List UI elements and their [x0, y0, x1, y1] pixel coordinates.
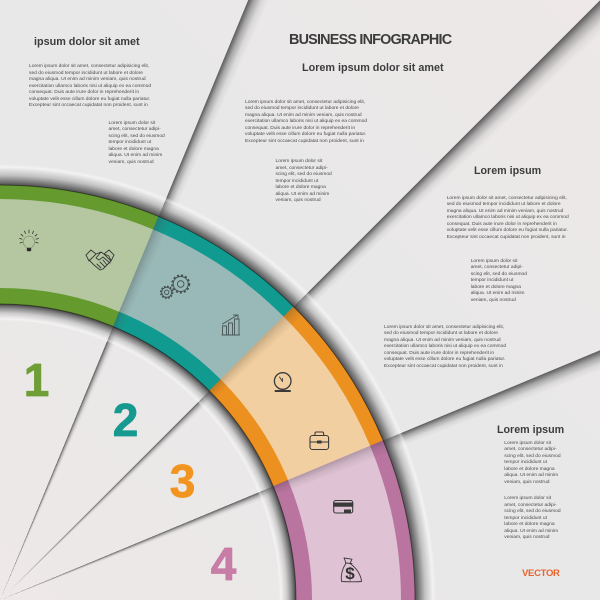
icon: clock [274, 373, 291, 391]
icon: money bag [341, 558, 362, 583]
text block: panel 4 lower: Lorem ipsum dolor sit amet, consectetur adipi- scing elit, sed do eiusmod tempor incididunt ut labore et dolore magna aliqua. Ut enim ad minim veniam, quis nostrud [504, 496, 561, 540]
heading: panel 4: Lorem ipsum [497, 424, 564, 436]
icon: briefcase [310, 432, 329, 450]
icon: light bulb [20, 230, 38, 251]
text block: panel 3 narrow: Lorem ipsum dolor sit amet, consectetur adipi- scing elit, sed do eiusmod tempor incididunt ut labore et dolore magna aliqua. Ut enim ad minim veniam, quis nostrud [471, 259, 527, 303]
icon: money bag: $ [345, 564, 355, 583]
main title: BUSINESS INFOGRAPHIC [289, 32, 451, 48]
numeral 2: 2 [113, 394, 138, 446]
icon: credit card [334, 500, 353, 513]
text block: panel 4 upper: Lorem ipsum dolor sit amet, consectetur adipi- scing elit, sed do eiusmod tempor incididunt ut labore et dolore magna aliqua. Ut enim ad minim veniam, quis nostrud [504, 441, 561, 485]
text block: panel 2 narrow: Lorem ipsum dolor sit amet, consectetur adipi- scing elit, sed do eiusmod tempor incididunt ut labore et dolore magna aliqua. Ut enim ad minim veniam, quis nostrud [276, 159, 332, 203]
numeral 4: 4 [211, 538, 237, 590]
text block: panel 2 wide: Lorem ipsum dolor sit amet, consectetur adipisicing elit, sed do eiusmod tempor incididunt ut labore et dolore magna aliqua. Ut enim ad minim veniam, quis nostrud exercitation ullamco laboris nisi ut aliquip ex ea commod consequat. Duis aute irure dolor in reprehenderit in voluptate velit esse cillum dolore eu fugiat nulla pariatur. Excepteur sint occaecat cupidatat non proident, sunt in [245, 100, 367, 144]
text block: panel 3 wide: Lorem ipsum dolor sit amet, consectetur adipisicing elit, sed do eiusmod tempor incididunt ut labore et dolore magna aliqua. Ut enim ad minim veniam, quis nostrud exercitation ullamco laboris nisi ut aliquip ex ea commod consequat. Duis aute irure dolor in reprehenderit in voluptate velit esse cillum dolore eu fugiat nulla pariatur. Excepteur sint occaecat cupidatat non proident, sunt in [447, 196, 569, 240]
segment 2: teal [113, 216, 293, 391]
vector label: VECTOR [522, 568, 560, 578]
segment 1: green [0, 185, 158, 326]
icon: handshake [86, 250, 114, 270]
heading: panel 1: ipsum dolor sit amet [34, 36, 140, 48]
heading: panel 2: Lorem ipsum dolor sit amet [302, 62, 444, 74]
ray shadows on ring [114, 217, 386, 492]
numeral 3: 3 [170, 455, 195, 507]
segment 4: pink [273, 440, 415, 600]
numeral 1: 1 [24, 354, 49, 406]
segment 3: orange [209, 307, 383, 486]
text block: panel 3 lower wide: Lorem ipsum dolor sit amet, consectetur adipisicing elit, sed do eiusmod tempor incididunt ut labore et dolore magna aliqua. Ut enim ad minim veniam, quis nostrud exercitation ullamco laboris nisi ut aliquip ex ea commod consequat. Duis aute irure dolor in reprehenderit in voluptate velit esse cillum dolore eu fugiat nulla pariatur. Excepteur sint occaecat cupidatat non proident, sunt in [384, 325, 506, 369]
icon: gears [161, 275, 189, 298]
icon: growth chart [222, 315, 240, 335]
text block: panel 1 narrow: Lorem ipsum dolor sit amet, consectetur adipi- scing elit, sed do eiusmod tempor incididunt ut labore et dolore magna aliqua. Ut enim ad minim veniam, quis nostrud [108, 121, 165, 165]
heading: panel 3: Lorem ipsum [474, 164, 541, 176]
text block: panel 1 wide: Lorem ipsum dolor sit amet, consectetur adipisicing elit, sed do eiusmod tempor incididunt ut labore et dolore magna aliqua. Ut enim ad minim veniam, quis nostrud exercitation ullamco laboris nisi ut aliquip ex ea commod consequat. Duis aute irure dolor in reprehenderit in voluptate velit esse cillum dolore eu fugiat nulla pariatur. Excepteur sint occaecat cupidatat non proident, sunt in [29, 64, 151, 108]
